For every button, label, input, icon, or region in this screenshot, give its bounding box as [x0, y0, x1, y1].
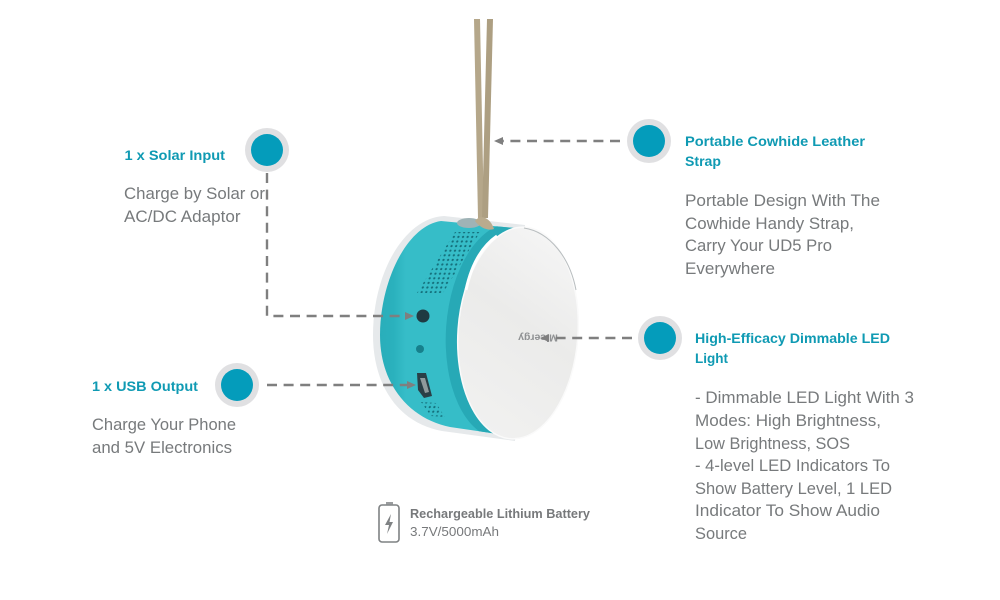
text: battery: 3.7V/5000mAh: [410, 525, 499, 539]
text: solar input: AC/DC Adaptor: [124, 208, 241, 226]
text: leather strap: [685, 192, 880, 278]
device: portable lantern speaker: [373, 19, 585, 443]
heading: LED light: [695, 330, 890, 366]
text: leather strap: Cowhide Handy Strap,: [685, 215, 854, 233]
arrow: usb output: [267, 381, 416, 389]
heading: leather strap: Portable Cowhide Leather: [685, 133, 866, 149]
lower speaker grille: [421, 402, 445, 417]
disc highlight: [466, 236, 497, 290]
text: LED light: - 4-level LED Indicators To: [695, 457, 890, 475]
heading: leather strap: Strap: [685, 153, 721, 169]
icon: battery: [379, 502, 399, 542]
text: solar input: Charge by Solar or: [124, 185, 265, 203]
text: leather strap: Carry Your UD5 Pro: [685, 237, 832, 255]
arrow: solar input: [267, 173, 414, 320]
heading: leather strap: [685, 133, 866, 169]
heading: LED light: High-Efficacy Dimmable LED: [695, 330, 890, 346]
heading: LED light: Light: [695, 350, 728, 366]
marker: solar input: [245, 128, 289, 172]
white LED disc: [451, 223, 585, 443]
leather strap: [474, 19, 493, 218]
text: LED light: Low Brightness, SOS: [695, 435, 850, 453]
arrow: LED light: [540, 334, 632, 342]
text: LED light: - Dimmable LED Light With 3: [695, 389, 914, 407]
disc edge shade: [524, 228, 576, 290]
marker: LED light: [638, 316, 682, 360]
body rim: [373, 216, 525, 441]
teal body band: [380, 221, 514, 434]
text: usb output: and 5V Electronics: [92, 439, 232, 457]
strap hole and knot: [457, 217, 494, 230]
text: usb output: [92, 416, 236, 457]
logo: Micergy: [518, 332, 558, 344]
text: LED light: Source: [695, 525, 747, 543]
text: leather strap: Everywhere: [685, 260, 775, 278]
dark stripe by disc: [446, 226, 514, 434]
speaker grille: [417, 232, 480, 293]
audio jack: [416, 345, 424, 353]
heading: usb output: 1 x USB Output: [92, 378, 198, 394]
heading: solar input: 1 x Solar Input: [124, 147, 225, 163]
marker: usb output: [215, 363, 259, 407]
arrow: leather strap: [494, 137, 620, 145]
usb port: [417, 373, 432, 398]
text: LED light: Show Battery Level, 1 LED: [695, 480, 892, 498]
text: solar input: [124, 185, 265, 226]
text: LED light: Indicator To Show Audio: [695, 502, 880, 520]
solar input jack: [416, 310, 430, 322]
marker: leather strap: [627, 119, 671, 163]
heading: battery: Rechargeable Lithium Battery: [410, 507, 590, 521]
text: LED light: Modes: High Brightness,: [695, 412, 881, 430]
text: leather strap: Portable Design With The: [685, 192, 880, 210]
text: usb output: Charge Your Phone: [92, 416, 236, 434]
text: LED light: [695, 389, 914, 543]
